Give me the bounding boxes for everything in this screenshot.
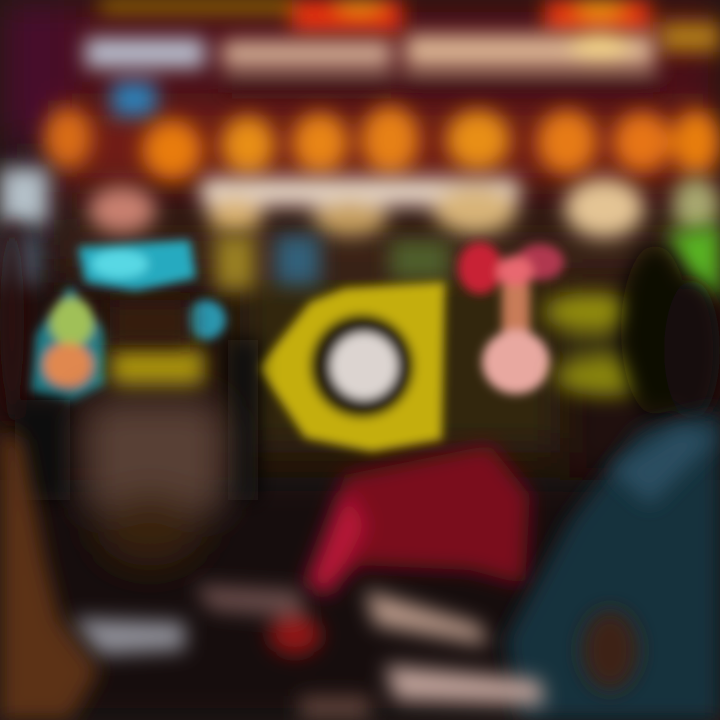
right yellow stacked signs	[544, 292, 655, 396]
upper white light band	[85, 31, 660, 116]
brown hair figure center left	[85, 400, 225, 566]
cyan sign	[78, 240, 226, 340]
left green and orange machine	[30, 285, 105, 402]
top marquee	[100, 0, 720, 52]
blue jacket figure right	[505, 410, 720, 720]
table papers	[72, 585, 545, 720]
brown sleeve left foreground	[0, 430, 100, 720]
red jacket figure	[305, 445, 530, 595]
lower white light band	[0, 168, 720, 238]
row of orange lanterns	[44, 106, 720, 180]
mid-level signs	[0, 235, 450, 290]
dark figure left	[0, 220, 258, 500]
jacket highlight	[582, 425, 720, 690]
red and pink figure sign	[458, 242, 564, 394]
right green glow	[665, 225, 720, 300]
yellow sign left	[110, 347, 205, 387]
dark head right	[621, 245, 720, 420]
central yellow badge	[258, 282, 445, 452]
